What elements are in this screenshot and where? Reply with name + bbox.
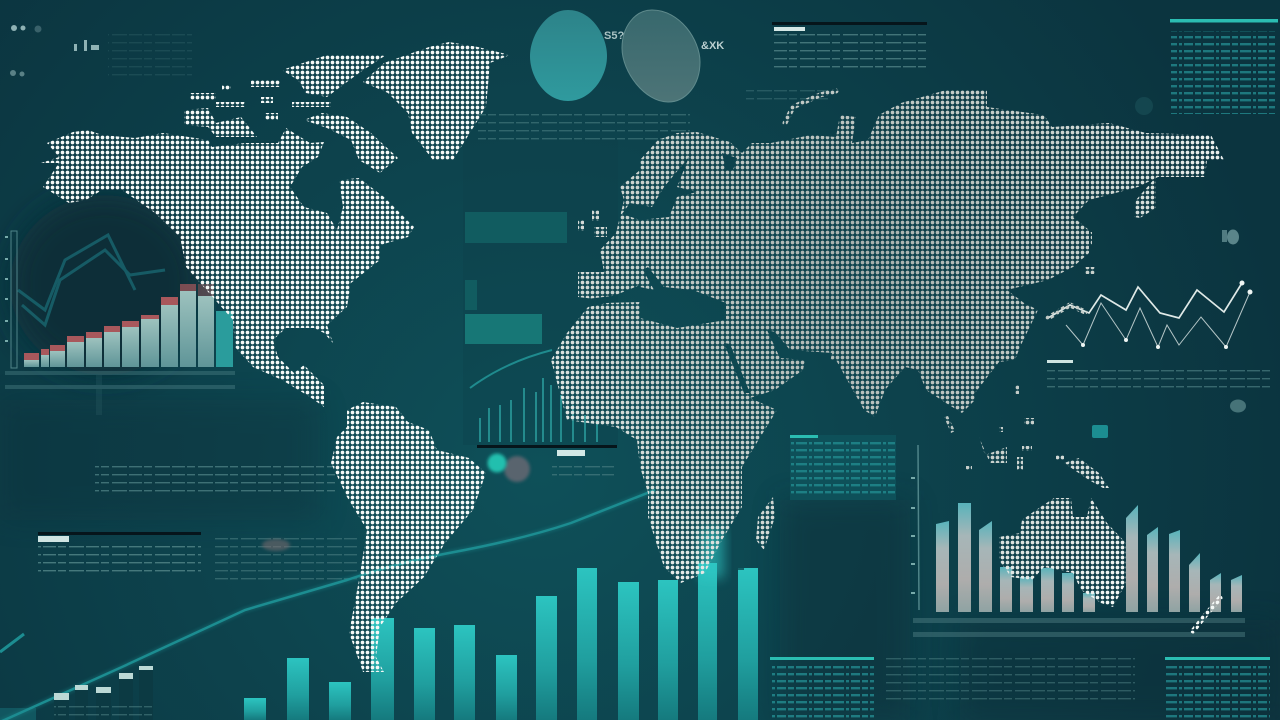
top-left small gauges bbox=[10, 25, 99, 76]
lower left table bbox=[215, 535, 358, 581]
map: dotted arcs bbox=[785, 91, 1220, 631]
shadow regions bbox=[0, 195, 1280, 720]
centre mini bar chart bbox=[479, 378, 598, 442]
text block under ovals bbox=[478, 112, 690, 140]
left area chart lines bbox=[18, 235, 165, 325]
panel: text mid right bbox=[790, 435, 896, 500]
map: Eurasia and Africa bbox=[551, 90, 1224, 583]
left chart axis bbox=[5, 231, 17, 368]
right line chart bbox=[1048, 280, 1252, 349]
panel: top middle text bbox=[772, 22, 927, 68]
left bar chart red caps bbox=[24, 284, 214, 367]
panel: top right text bbox=[1170, 19, 1278, 114]
panel: centre column with teal rows bbox=[463, 140, 618, 445]
top teal oval bbox=[530, 10, 607, 101]
map: Arctic islands bbox=[184, 55, 398, 173]
panel: bottom text right bbox=[1165, 657, 1270, 720]
faint caption bbox=[744, 84, 828, 100]
top grey oval bbox=[622, 10, 700, 102]
map: Greenland bbox=[363, 42, 510, 160]
right bar chart bbox=[936, 503, 1242, 612]
text under line chart bbox=[1047, 360, 1271, 392]
map: Australia bbox=[999, 498, 1126, 607]
centre small trend curve bbox=[470, 350, 552, 388]
panel: lower left text bbox=[38, 532, 201, 576]
oval glyph label right: &XK bbox=[701, 40, 724, 52]
bottom middle text bbox=[883, 657, 1135, 702]
bottom left small stacked bars bbox=[0, 666, 153, 720]
small right icons bbox=[1092, 97, 1246, 438]
right chart axis bbox=[911, 445, 919, 610]
panel: bottom text left bbox=[770, 657, 874, 720]
oval glyph label left: S5? bbox=[604, 30, 624, 42]
main teal trend curve bbox=[0, 490, 655, 720]
left bar chart bbox=[24, 291, 233, 367]
text block lower left bbox=[95, 465, 335, 497]
centre bottom bar chart bbox=[244, 563, 758, 720]
legend blobs bbox=[488, 454, 530, 482]
centre chart baseline and tag bbox=[477, 445, 617, 482]
map: South America bbox=[331, 402, 486, 672]
map: island groups bbox=[578, 177, 1156, 550]
top-left faint data grid bbox=[108, 30, 192, 80]
map: North America bbox=[41, 128, 414, 407]
right chart platform bbox=[913, 618, 1245, 637]
left chart platform bbox=[5, 371, 235, 415]
glow above tall bars bbox=[700, 528, 744, 578]
